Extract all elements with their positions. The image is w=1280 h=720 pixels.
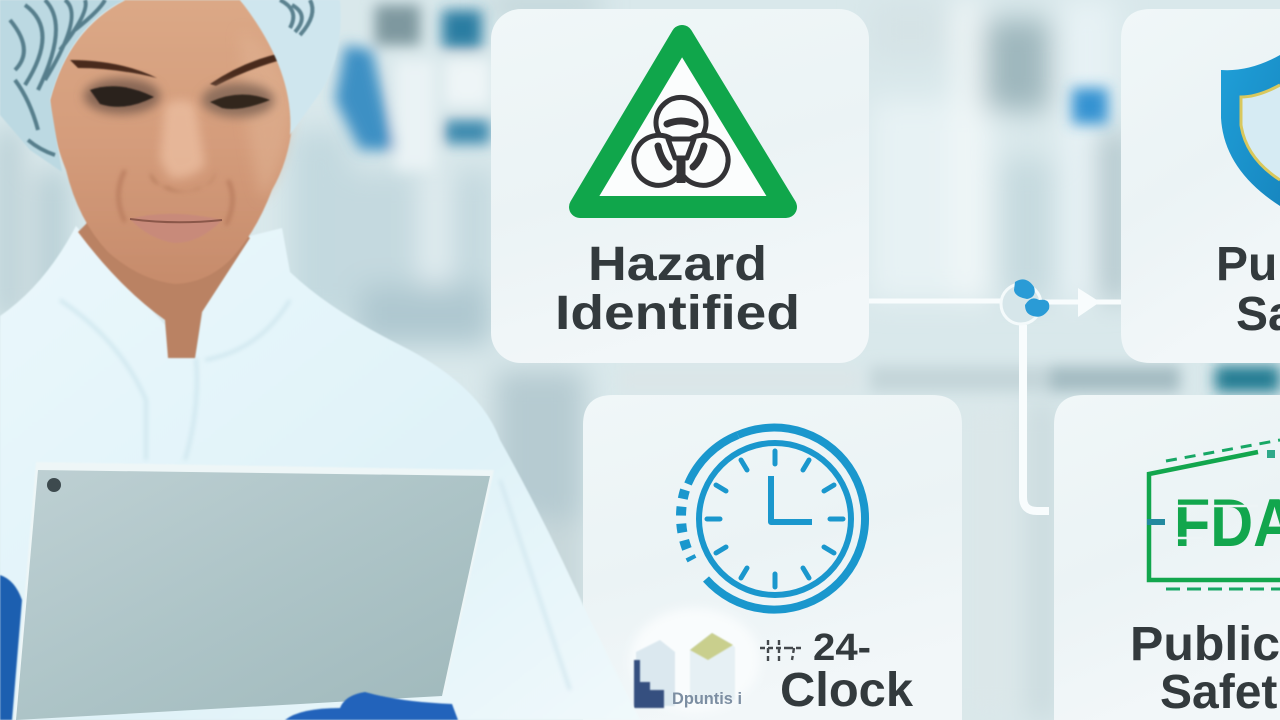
icon: small facility graphic: Dpuntis i	[672, 689, 742, 708]
panel: hazard identified	[491, 9, 869, 363]
heading: hazard identified	[555, 238, 800, 340]
icon: FDA badge	[1147, 440, 1280, 589]
face	[50, 0, 293, 284]
icon: small facility graphic	[630, 608, 802, 712]
heading: 24-clock	[780, 627, 913, 717]
panel: public safety top right	[1121, 9, 1280, 363]
heading: public safety cropped: Pu	[1216, 238, 1277, 291]
heading: 24-clock: Clock	[780, 664, 913, 717]
heading: public safety cropped	[1216, 238, 1280, 341]
tablet	[0, 462, 494, 720]
neck	[78, 200, 250, 358]
panel: public safety FDA	[1054, 395, 1280, 720]
heading: hazard identified: Identified	[555, 287, 800, 340]
panel: 24-hour clock	[583, 395, 962, 720]
icon: biohazard warning triangle	[580, 36, 786, 207]
lab coat	[0, 226, 640, 720]
blue glove	[285, 692, 458, 720]
heading: public safety cropped lower	[1130, 618, 1280, 719]
heading: 24-clock: 24-	[813, 627, 871, 669]
connector: arrows and node	[869, 279, 1121, 511]
heading: hazard identified: Hazard	[588, 238, 767, 291]
photo: scientist in lab coat	[0, 0, 640, 720]
heading: public safety cropped lower: Safet	[1160, 666, 1277, 719]
heading: public safety cropped lower: Public	[1130, 618, 1280, 671]
icon: clock	[681, 428, 865, 610]
icon: shield	[1221, 55, 1280, 206]
hairnet	[0, 0, 341, 172]
